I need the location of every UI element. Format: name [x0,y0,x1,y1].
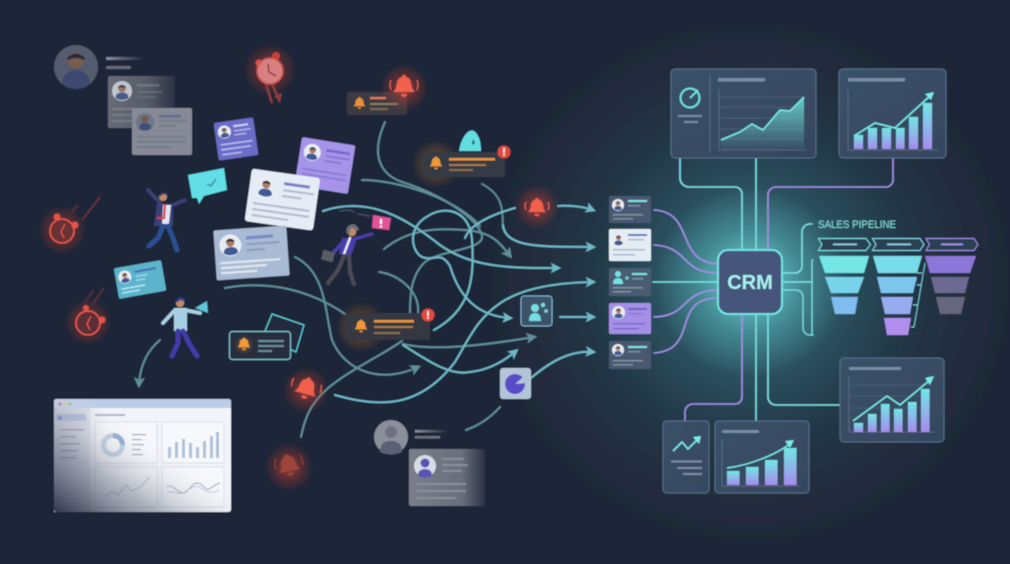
faded profile: top left [54,45,144,89]
donut panel [95,422,157,463]
pie chart icon box [500,368,531,399]
notification with badge [412,140,510,188]
sidebar [54,408,90,512]
teal profile card [114,260,166,299]
person running [148,190,185,250]
CRM connector lines [653,158,893,421]
speech bubble [188,168,227,204]
source card 1 [609,196,651,223]
icon: gauge [680,88,700,108]
funnel column 3 [925,256,976,314]
purple profile card [214,117,258,161]
dashboard window [54,399,231,512]
dashboard panel: trend card [663,421,709,493]
source card 5 [609,341,651,369]
faded card 1 [108,76,175,128]
red bell: lower [283,367,329,413]
faded card: bottom [409,449,485,506]
red bell: middle [514,184,560,230]
team icon box [521,296,552,326]
teal tag [459,130,481,151]
source card 3 [609,268,651,296]
tangled workflow arrows [139,122,593,437]
blue-gray profile card [213,225,290,280]
alarm clock: left [38,197,100,254]
notification center [336,302,434,352]
CRM box [718,250,782,314]
funnel column 2 [873,256,925,335]
lilac profile card [294,137,355,194]
dashboard panel: bars bottom [715,421,809,493]
notification top [347,92,407,115]
person with megaphone [163,299,208,356]
sales pipeline label: SALES PIPELINE [818,219,896,231]
multi line panel [162,467,224,507]
faded card 2 [132,108,192,155]
faded profile: bottom [374,420,449,454]
red bell: top [380,64,428,112]
source card 2 [609,229,651,261]
dashboard panel: area chart [671,69,816,158]
funnel column 1 [819,256,869,314]
window header [54,399,231,408]
pipeline stage headers [818,238,978,250]
person with briefcase [321,210,391,284]
source card 4 [609,303,651,334]
dashboard panel: bars top right [839,69,946,158]
dashboard panel: bars right [840,358,944,442]
line panel [95,467,157,507]
overlapping alert card [230,314,304,360]
alarm clock: top [244,44,296,103]
bars panel [162,422,224,463]
white profile card [245,169,320,231]
alarm clock: lower [65,288,111,345]
red bell: dim [265,443,313,491]
CRM box: CRM [727,272,773,294]
